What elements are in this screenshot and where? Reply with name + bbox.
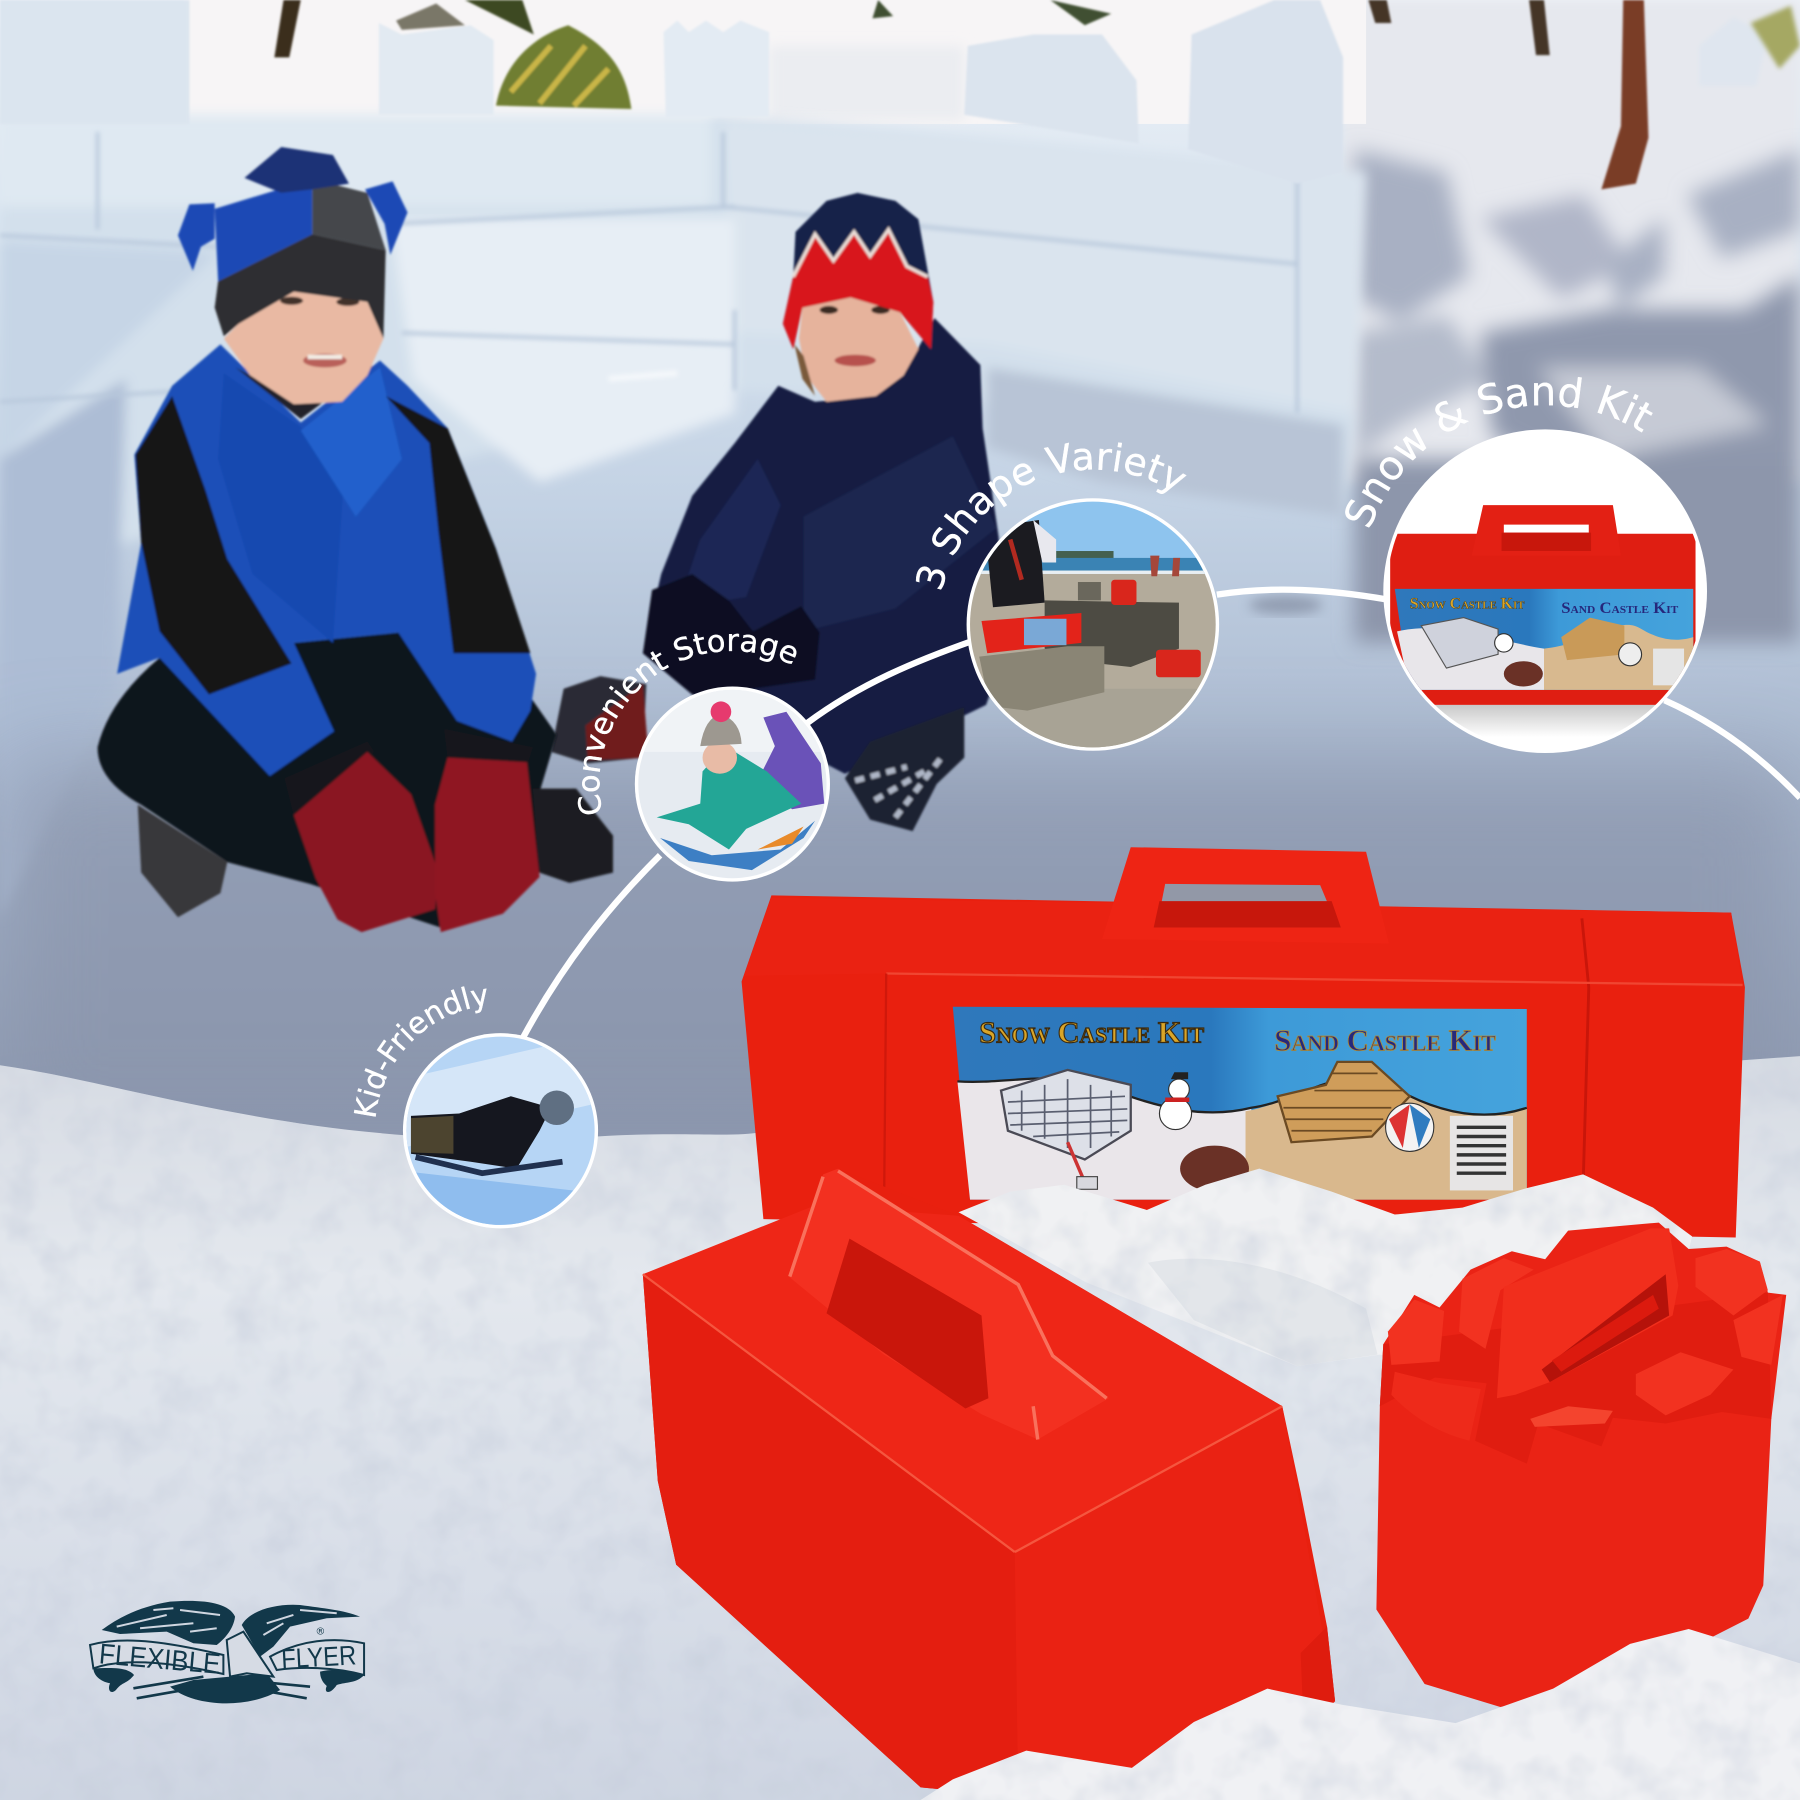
child on the left [98, 147, 613, 932]
caption: Snow & Sand Kit: Snow & Sand Kit [1345, 377, 1653, 528]
right wing [242, 1605, 360, 1657]
face [799, 297, 918, 402]
snow ground top [184, 0, 1366, 124]
tassels [178, 203, 215, 271]
mini case [1390, 534, 1696, 705]
battlements [0, 0, 1343, 184]
black sleeves [135, 396, 292, 695]
connector: kid-friendly to storage [522, 855, 660, 1039]
caption: Convenient Storage: Convenient Storage [578, 634, 796, 814]
crenel: right back [1696, 1249, 1768, 1316]
label heading: snow: Snow Castle Kit [979, 1014, 1205, 1049]
edge highlight [643, 1274, 1282, 1552]
circle: kid-friendly [402, 1033, 603, 1228]
label heading: sand: Sand Castle Kit [1274, 1022, 1496, 1057]
mini label [1395, 589, 1693, 690]
crenel: back left [1459, 1258, 1534, 1349]
beach ball [1386, 1103, 1434, 1151]
seal [1180, 1146, 1249, 1192]
crenel: front right [1636, 1352, 1733, 1415]
sled [660, 821, 815, 870]
mold body [1376, 1223, 1786, 1707]
logo text: FLEXIBLE: FLEXIBLE [98, 1638, 222, 1681]
face [224, 292, 383, 404]
jacket [643, 318, 1004, 774]
crenel: left [1388, 1299, 1444, 1365]
snowman [1159, 1097, 1192, 1130]
shovel [1068, 1142, 1085, 1182]
case body [742, 895, 1745, 1238]
handle hole [1542, 1274, 1669, 1382]
left wing [102, 1601, 235, 1645]
legs [98, 633, 613, 930]
rider face [703, 742, 737, 774]
sand fort [1278, 1062, 1410, 1142]
mini barcode [1653, 649, 1684, 685]
red cases [982, 613, 1081, 653]
snow half [957, 1078, 1251, 1200]
boot left [138, 805, 227, 917]
registered mark: ® [315, 1627, 325, 1638]
neck shadow [235, 365, 373, 419]
purple rider [758, 712, 824, 809]
foreground snow [0, 1056, 1800, 1800]
bolts and shield [170, 1673, 280, 1703]
hat [783, 193, 933, 349]
hair [794, 344, 815, 396]
top face [643, 1205, 1282, 1552]
blue jacket [117, 344, 536, 776]
circle: snow and sand kit: Sand Castle Kit [1561, 600, 1679, 617]
right cuff [444, 729, 533, 766]
sledder [411, 1096, 551, 1169]
connector: shape variety to kit [1217, 590, 1386, 599]
mini snow fort [1421, 618, 1498, 668]
boot right [845, 707, 964, 831]
right glove [435, 758, 540, 932]
product label [953, 1007, 1527, 1200]
recessed band [1380, 1293, 1771, 1464]
man [985, 520, 1045, 607]
beach walkers [1150, 556, 1180, 576]
lower haze [0, 758, 1800, 1148]
barcode [1450, 1116, 1513, 1190]
logo text: FLYER: FLYER [280, 1639, 357, 1674]
left glove [294, 752, 439, 932]
eagle body [227, 1632, 273, 1677]
snow shadow smear [1249, 596, 1322, 614]
ribbon tails [93, 1668, 134, 1692]
knit hat [700, 718, 742, 746]
mini sand fort [1561, 618, 1624, 660]
caption: 3 Shape Variety: 3 Shape Variety [916, 442, 1186, 590]
handle [1497, 1228, 1678, 1398]
sand castle blocks [1045, 600, 1179, 667]
handle highlights [790, 1171, 1107, 1440]
circle: snow and sand kit [1378, 425, 1716, 763]
right boot [533, 789, 613, 883]
circle: convenient storage [634, 686, 830, 882]
handle hole [827, 1239, 988, 1409]
foreground snow bank [921, 1629, 1800, 1800]
snow fort [1001, 1070, 1131, 1159]
crenel: front left [1391, 1372, 1481, 1441]
circle: snow and sand kit: Snow Castle Kit [1410, 595, 1525, 612]
left ribbon [90, 1641, 223, 1674]
circle: 3 shape variety [964, 494, 1223, 758]
crenel: front [1530, 1406, 1613, 1427]
caption: Kid-Friendly: Kid-Friendly [354, 986, 487, 1117]
white snow pile [959, 1169, 1692, 1401]
child on the right [551, 193, 1004, 831]
sand half [1246, 1078, 1527, 1200]
left face [643, 1274, 1018, 1797]
Flexible Flyer logo [90, 1601, 364, 1703]
wall block lines [0, 132, 1297, 413]
teal rider [657, 746, 801, 849]
small round-end mold [1376, 1223, 1786, 1707]
crenel: far right [1733, 1295, 1783, 1365]
trees and bush [274, 0, 1648, 189]
large block mold [643, 1169, 1335, 1797]
red castle kit case [742, 847, 1745, 1238]
dark mitts [643, 574, 820, 695]
curved captions [354, 377, 1653, 1117]
left cuff [285, 742, 374, 815]
boot left [551, 676, 646, 763]
connector lines [522, 590, 1800, 1039]
handle [789, 1169, 1109, 1440]
mini seal [1504, 661, 1543, 686]
connector: storage to shape variety [807, 641, 973, 723]
right ribbon [270, 1640, 364, 1675]
case handle [1102, 847, 1389, 944]
right snowfield [1343, 0, 1800, 643]
castle wall [0, 115, 1366, 918]
right face [1015, 1406, 1335, 1797]
connector: kit to edge [1665, 700, 1800, 798]
hat [215, 234, 386, 339]
